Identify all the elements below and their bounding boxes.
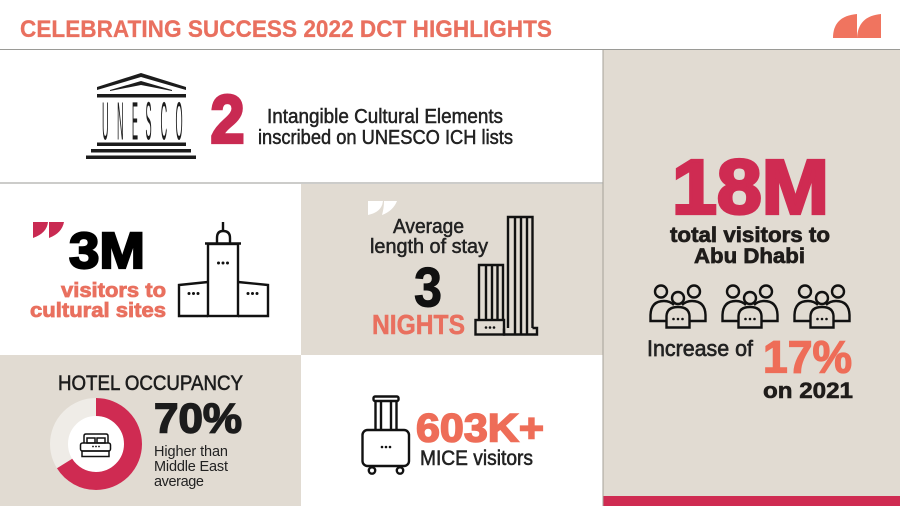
big number 2: 2 xyxy=(210,82,244,158)
red footer bar xyxy=(603,496,900,506)
icon: UNESCO temple logo: UNESCO xyxy=(102,92,183,152)
icon: bed xyxy=(80,434,110,456)
panel: UNESCO intangible elements xyxy=(86,73,513,159)
text: higher than middle east average: average xyxy=(154,474,204,490)
big number 70%: 70% xyxy=(154,394,242,442)
big number 603K+: 603K+ xyxy=(416,406,544,450)
text: visitors to cultural sites xyxy=(30,279,166,322)
panel: length of stay xyxy=(368,201,537,340)
big number 17%: 17% xyxy=(763,332,852,382)
big number 3: 3 xyxy=(414,256,442,318)
text: total visitors to Abu Dhabi xyxy=(670,224,830,268)
text: on 2021: on 2021 xyxy=(763,378,853,403)
icon: people groups xyxy=(650,286,850,328)
text: increase of: Increase of xyxy=(647,336,754,361)
text: intangible cultural elements: Intangible Cultural Elements xyxy=(267,106,503,128)
panel: hotel occupancy xyxy=(58,372,243,490)
panel: total visitors xyxy=(647,144,853,403)
text: total visitors to Abu Dhabi: total visitors to xyxy=(670,224,830,247)
text: higher than middle east average: Middle East xyxy=(154,459,228,475)
big number 3M: 3M xyxy=(69,222,145,279)
panel: cultural site visitors xyxy=(30,222,268,322)
icon: UNESCO temple logo xyxy=(86,73,196,159)
text: average length of stay xyxy=(370,216,488,258)
icon: red quote mark xyxy=(33,222,64,238)
text: total visitors to Abu Dhabi: Abu Dhabi xyxy=(694,245,805,268)
panel: hotel occupancy background xyxy=(0,355,301,506)
text: higher than middle east average xyxy=(154,444,228,490)
title: CELEBRATING SUCCESS 2022 DCT HIGHLIGHTS xyxy=(20,16,552,43)
panel: total visitors background xyxy=(603,50,900,506)
icon: mosque building xyxy=(179,222,268,316)
icon: suitcase xyxy=(362,396,409,474)
text: visitors to cultural sites: visitors to xyxy=(61,279,166,302)
big number 18M: 18M xyxy=(672,144,829,230)
panel: length of stay background xyxy=(301,184,603,355)
text: average length of stay: Average xyxy=(393,216,464,238)
text: higher than middle east average: Higher than xyxy=(154,444,228,460)
icon: header quote mark xyxy=(833,14,881,38)
panel: MICE visitors xyxy=(362,396,544,474)
text: intangible cultural elements xyxy=(258,106,513,149)
text: nights: NIGHTS xyxy=(372,309,465,340)
icon: white quote mark xyxy=(368,201,397,215)
text: average length of stay: length of stay xyxy=(370,236,488,258)
text: intangible cultural elements: inscribed on UNESCO ICH lists xyxy=(258,127,513,149)
heading: hotel occupancy: HOTEL OCCUPANCY xyxy=(58,372,243,395)
chart: occupancy donut xyxy=(59,407,133,481)
text: MICE visitors: MICE visitors xyxy=(420,447,533,470)
icon: tower buildings xyxy=(476,217,537,334)
text: visitors to cultural sites: cultural sites xyxy=(30,299,166,322)
